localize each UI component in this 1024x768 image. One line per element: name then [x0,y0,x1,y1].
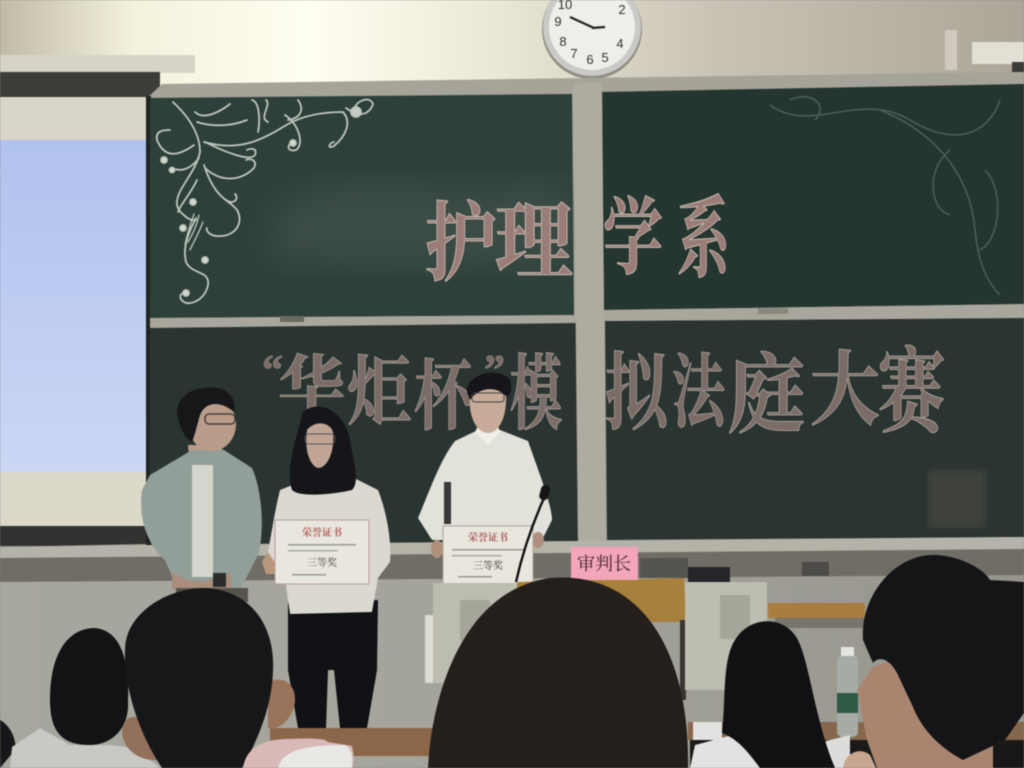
person: man in white shirt [418,373,552,558]
chalk heading: competition name: “ [262,348,283,394]
chalk heading: competition name: 炬 [345,351,412,435]
chalk heading: department: 系 [677,190,731,288]
projector screen [0,55,195,546]
chalk heading: competition name: 模 [510,349,562,440]
name card [571,547,638,580]
water bottle and table [688,647,1024,768]
chalk heading: competition name: 杯 [414,354,476,440]
person: man in grey-green shirt [141,387,262,602]
wall clock: 5 [601,50,609,65]
panel: blackboard bottom right [605,318,1024,540]
wall clock: 4 [616,36,624,51]
wall lower band and ledge [0,537,1024,582]
microphone [516,484,551,582]
wall clock: 6 [586,52,594,67]
chalk heading: competition name: 庭 [728,348,805,444]
table front [270,728,436,756]
certificate: right: 荣誉证书 [468,531,509,544]
audience: boy right [843,555,1024,768]
wall clock: 7 [570,46,578,61]
dark frame edge [146,96,151,546]
audience: girl right [690,621,850,768]
audience: girl left [0,628,160,768]
chalk heading: department [425,190,731,293]
audience: boy centre-left [122,588,354,768]
panel: blackboard top right [602,84,1024,310]
panel: blackboard top left [150,94,574,318]
blackboard frame [0,72,1024,557]
audience: long hair centre [428,577,688,768]
chalk heading: competition name [262,343,950,445]
panel: blackboard bottom left [150,322,578,545]
board centre pillar [573,82,606,545]
certificate: left [275,520,369,584]
podium and desk [425,558,865,700]
certificate: left: 荣誉证书 [302,526,343,539]
chalk smudge lower right [928,470,986,528]
wall clock: 8 [559,34,567,49]
chalk heading: department: 学 [603,192,663,285]
chalk flourish top left [157,100,373,303]
chalk heading: department: 护 [425,197,497,293]
chalk heading: competition name: 大 [810,347,880,436]
certificate: right [443,526,533,584]
chalk heading: competition name: ” [484,348,505,394]
wall clock [542,0,642,79]
wall clock: 9 [554,14,562,29]
wall clock: 2 [618,2,626,17]
certificate: right: 三等奖 [473,559,503,572]
chalk flourish top right [770,97,1000,295]
chalk heading: department: 理 [495,198,573,288]
chalk ledges [150,304,1024,328]
wall fixture top right [945,30,1024,92]
chalk heading: competition name: 法 [672,349,729,438]
name card: 审判长 [577,554,631,574]
certificate: left: 三等奖 [307,556,337,569]
person: woman in white blouse [262,407,390,728]
chalk heading: competition name: 拟 [605,348,672,441]
chalk heading: competition name: 华 [278,352,345,423]
chalk heading: competition name: 赛 [878,343,950,445]
